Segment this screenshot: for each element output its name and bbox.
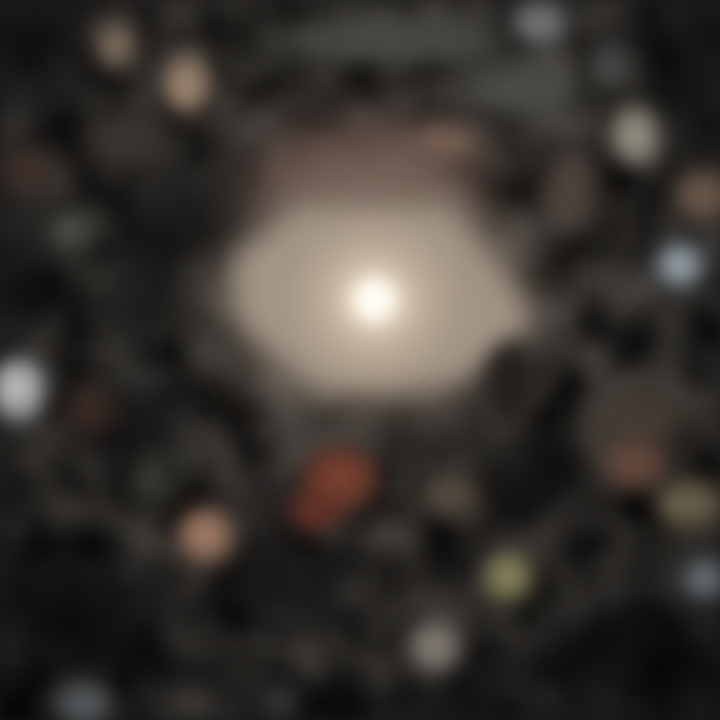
core glow <box>232 208 538 390</box>
lighter grey streaks at the top <box>92 18 688 452</box>
warm halo around the core <box>220 128 530 415</box>
dark bottom-right intrusion <box>486 343 534 427</box>
galaxy core <box>280 205 470 395</box>
bright centre <box>355 280 395 320</box>
